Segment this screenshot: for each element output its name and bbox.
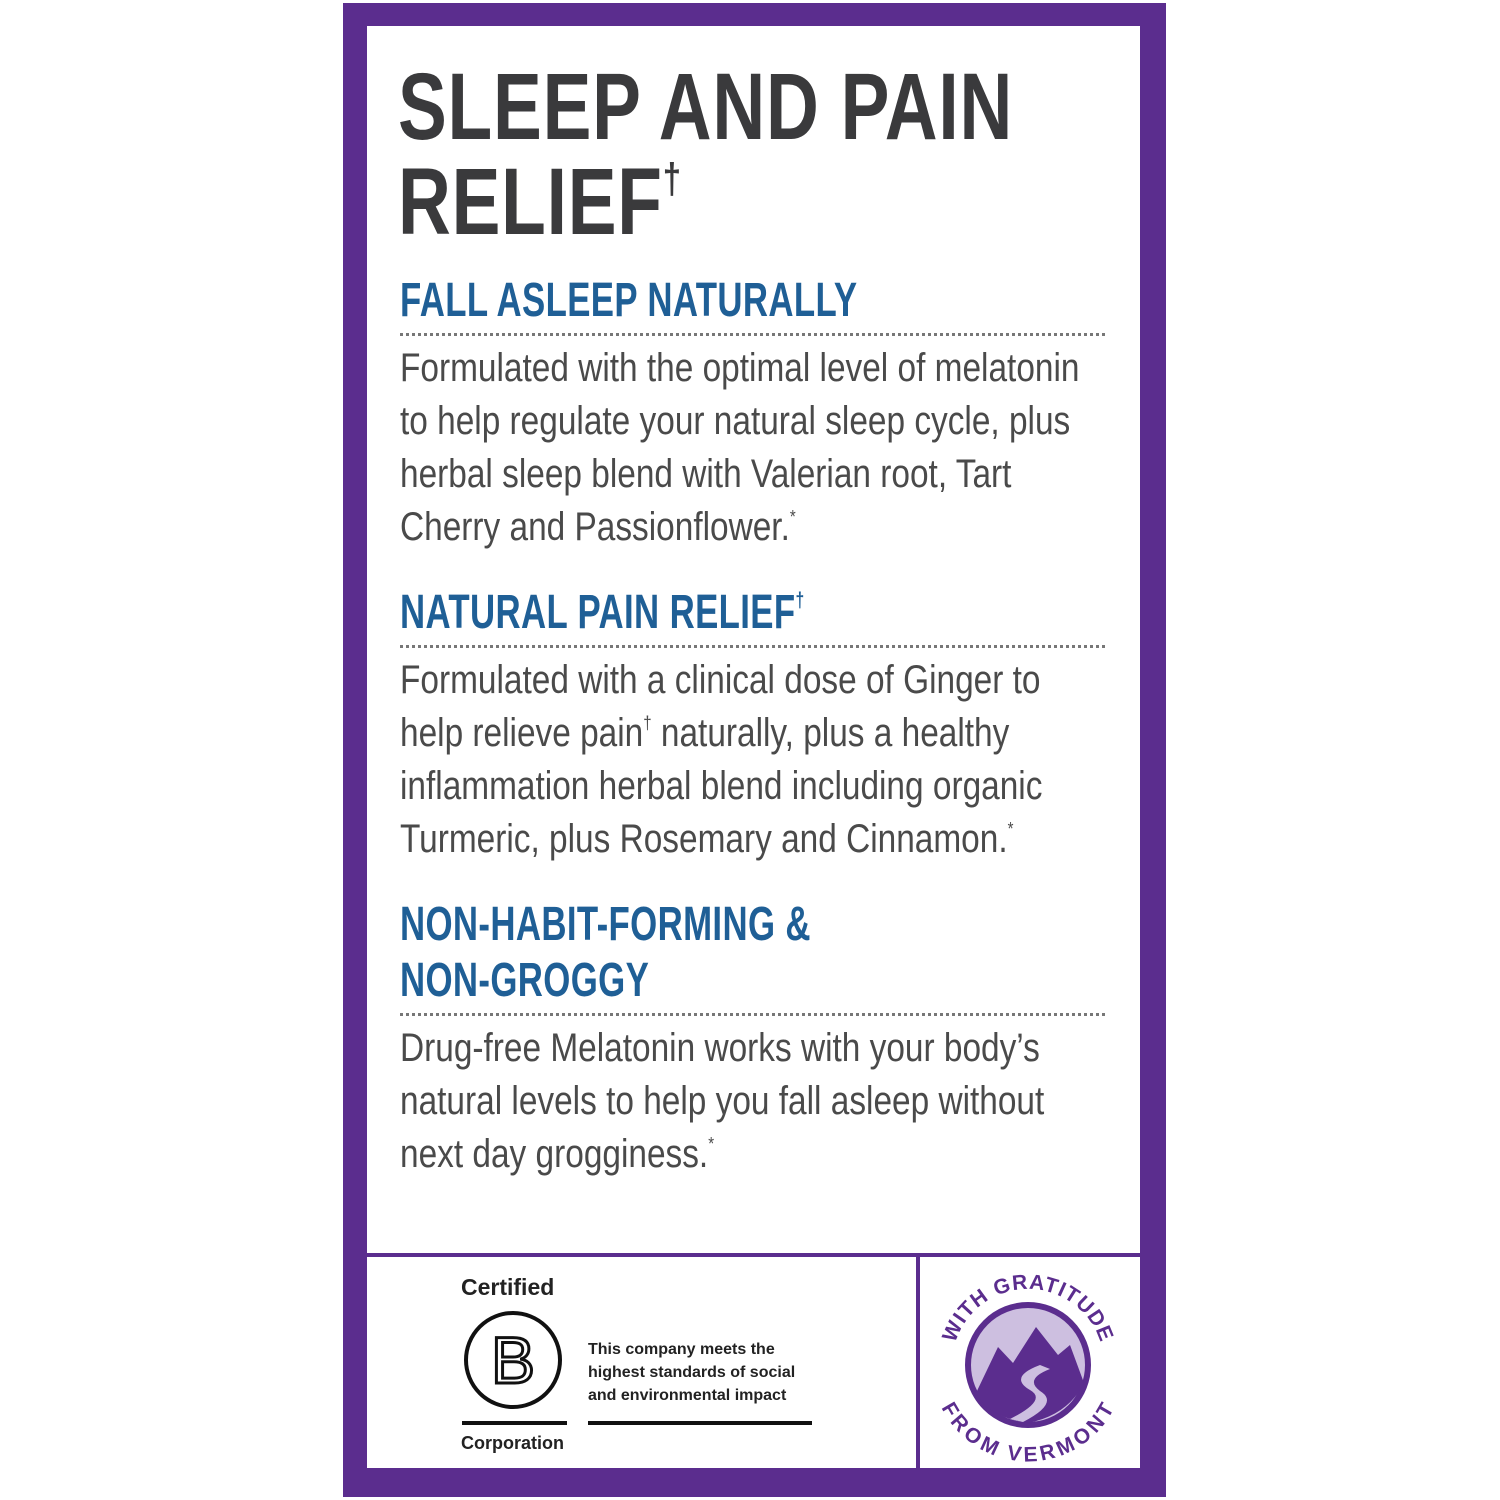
text block: fall asleep: Cherry and Passionflower.*	[400, 505, 796, 549]
title	[398, 54, 1013, 255]
text: standards: highest standards of social	[588, 1364, 795, 1381]
icon: B circle: B	[491, 1323, 535, 1397]
heading: fall asleep naturally: FALL ASLEEP NATURALLY	[400, 274, 857, 327]
text block: non-habit-forming: next day grogginess.*	[400, 1132, 714, 1176]
text block: pain relief: help relieve pain† naturally, plus a healthy	[400, 711, 1009, 755]
panel: inner white area	[367, 26, 1140, 1468]
text block: fall asleep: Formulated with the optimal level of melatonin	[400, 346, 1079, 390]
title: RELIEF†	[398, 149, 682, 255]
badge: certified B corporation	[461, 1274, 812, 1453]
text block: pain relief: inflammation herbal blend including organic	[400, 764, 1042, 808]
divider lines	[367, 1253, 1140, 1257]
text block: fall asleep: herbal sleep blend with Valerian root, Tart	[400, 452, 1011, 496]
badge: with gratitude from vermont: WITH GRATITUDE	[941, 1274, 1114, 1342]
icon: B circle	[464, 1311, 562, 1409]
heading: non-habit-forming: NON-HABIT-FORMING &	[400, 898, 811, 951]
panel: purple frame	[343, 3, 1166, 1497]
heading: natural pain relief: NATURAL PAIN RELIEF†	[400, 586, 805, 639]
text block: non-habit-forming: natural levels to help you fall asleep without	[400, 1079, 1044, 1123]
text: standards: This company meets the	[588, 1341, 775, 1358]
text: corporation: Corporation	[461, 1433, 564, 1453]
badge: with gratitude from vermont	[941, 1274, 1114, 1462]
text block: fall asleep: to help regulate your natural sleep cycle, plus	[400, 399, 1070, 443]
text: certified: Certified	[461, 1274, 554, 1300]
heading: non-habit-forming	[400, 898, 811, 1007]
text: standards	[588, 1341, 795, 1404]
title: SLEEP AND PAIN	[398, 54, 1013, 160]
heading: non-habit-forming: NON-GROGGY	[400, 954, 649, 1007]
text block: pain relief: Turmeric, plus Rosemary and Cinnamon.*	[400, 817, 1013, 861]
badge: with gratitude from vermont: FROM VERMONT	[942, 1401, 1112, 1462]
text block: pain relief	[400, 658, 1042, 861]
text block: non-habit-forming	[400, 1026, 1044, 1176]
text block: pain relief: Formulated with a clinical dose of Ginger to	[400, 658, 1040, 702]
text: standards: and environmental impact	[588, 1387, 786, 1404]
text block: non-habit-forming: Drug-free Melatonin works with your body’s	[400, 1026, 1040, 1070]
text block: fall asleep	[400, 346, 1079, 549]
